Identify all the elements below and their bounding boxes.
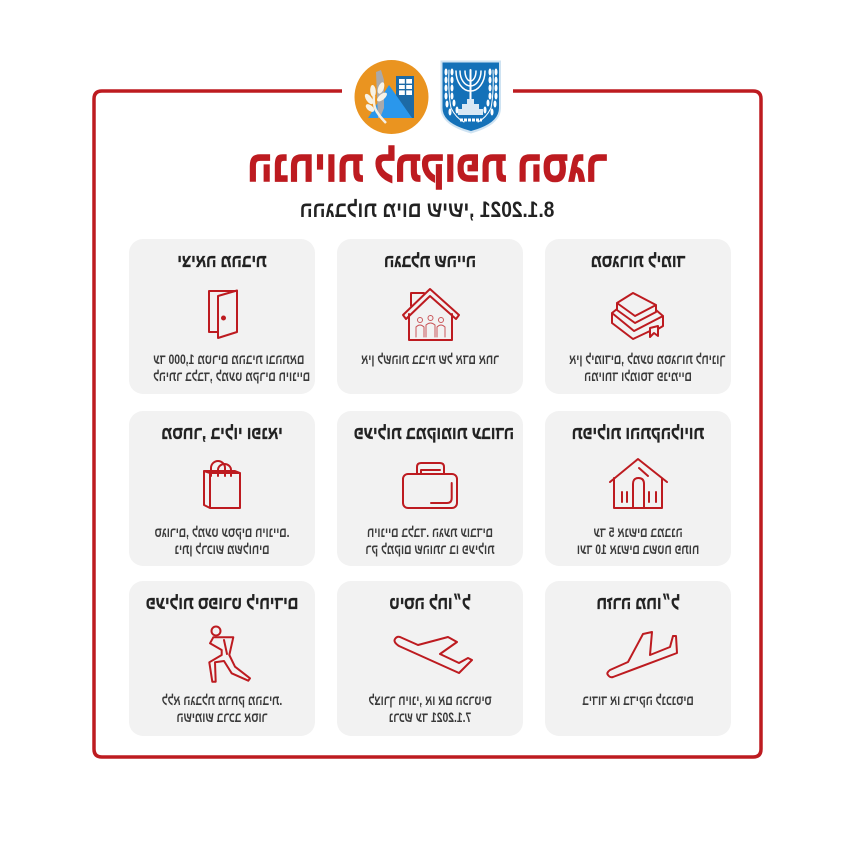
heading: חזרה מחו״ל <box>596 592 680 613</box>
icon: shopping bag <box>203 460 241 509</box>
icon: books <box>611 292 664 340</box>
text <box>577 524 699 557</box>
icon: house with family <box>402 288 460 341</box>
heading: פעילות במקומות עבודה <box>354 422 514 443</box>
heading: הגבלת שהייה <box>384 250 476 271</box>
heading: טיסה לחו״ל <box>389 592 471 613</box>
text: אין לימודים, למעט מסגרות לחינוך <box>569 351 725 367</box>
icon: door <box>208 290 238 339</box>
text: המיוחד ולמוסד פנימיים <box>584 368 692 384</box>
icon: runner <box>208 626 251 683</box>
heading: תפילות והתקהלויות <box>572 422 704 443</box>
panel: prayer and gatherings <box>545 411 731 566</box>
text: ועד 10 אנשים בשטח פתוח <box>577 541 699 557</box>
text: לצורך חיוני, או אם הכרטיס <box>368 692 492 708</box>
heading: מסחר, בילוי ופנאי <box>161 422 283 443</box>
panel: school frameworks <box>545 239 731 394</box>
text: עד 1,000 מטרים מהבית ובהתאם <box>153 351 304 367</box>
text <box>365 524 495 557</box>
icon: departing plane <box>394 636 473 674</box>
panel: stay restrictions <box>337 239 523 394</box>
text: רק למקום שהותר בו פעילות <box>365 541 495 557</box>
text: בידוד או בדיקה לנכנסים <box>582 692 694 708</box>
panel: leaving home <box>129 239 315 394</box>
text <box>368 692 492 725</box>
text <box>154 524 290 557</box>
text <box>569 351 726 384</box>
icon: prayer house <box>609 458 668 509</box>
text: אין לשהות בבית של אדם אחר <box>361 351 499 367</box>
panel: workplaces <box>337 411 523 566</box>
title: הנחיות לתקופת הסגר <box>247 143 607 191</box>
heading: יציאה מהבית <box>177 250 267 271</box>
text: עד 5 אנשים במבנה <box>593 524 683 540</box>
text <box>153 351 310 384</box>
heading: פעילות ספורט ליחידים <box>146 592 298 613</box>
panel: commerce and leisure <box>129 411 315 566</box>
text: סגורים, למעט עסקים חיוניים. <box>154 524 290 540</box>
icon: suitcase <box>402 462 458 509</box>
text: חיוניים בלבד. הגעת עובדים <box>367 524 493 540</box>
subtitle: ההגבלות מיום שישי, 8.1.2021 <box>300 197 554 222</box>
text: נרכש עד 7.1.2021 <box>389 709 471 725</box>
heading: מסגרות לימוד <box>591 250 685 271</box>
text <box>162 692 282 725</box>
icon: landing plane <box>606 631 678 678</box>
text: ניתן לרכוש משלוחים <box>175 541 269 557</box>
text: להיתר בלבד, למעט מקרים חיוניים <box>153 368 310 384</box>
panel: return from abroad <box>545 581 731 736</box>
text: ללא הגבלת מרחק מהבית. <box>162 692 282 708</box>
text: השימוש ברכב אסור <box>176 709 268 725</box>
panel: solo sport <box>129 581 315 736</box>
panel: flights abroad <box>337 581 523 736</box>
